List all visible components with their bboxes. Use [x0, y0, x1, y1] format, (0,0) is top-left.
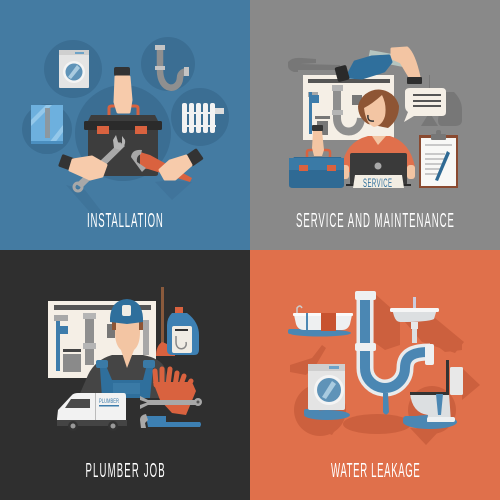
icon: laptop	[346, 153, 411, 186]
icon: top hand	[114, 67, 131, 112]
icon: bathtub	[288, 306, 353, 336]
poster	[303, 75, 394, 140]
silhouette wrench	[288, 58, 340, 72]
panel background blue	[0, 0, 250, 250]
panel background orange	[250, 250, 500, 500]
silhouette hands and tools	[290, 328, 462, 375]
icon: gloves	[153, 369, 196, 415]
icon: van: PLUMBER	[99, 399, 119, 405]
panel: plumber job	[0, 250, 250, 500]
icon: blue toolbox and hand	[289, 125, 344, 188]
heading: water leakage: WATER LEAKAGE	[331, 460, 420, 482]
heading: plumber job: PLUMBER JOB	[86, 460, 165, 482]
icon: sink	[390, 297, 439, 343]
icon: radiator	[182, 103, 224, 133]
jug silhouette	[438, 92, 462, 126]
icon: left hand with wrench	[58, 135, 125, 191]
poster	[48, 301, 156, 378]
icon: toilet	[403, 360, 463, 429]
icon: van	[57, 393, 127, 431]
long shadows	[31, 55, 192, 225]
panel background gray	[250, 0, 500, 250]
panel: service and maintenance	[250, 0, 500, 250]
panel background dark	[0, 250, 250, 500]
icon: clipboard	[419, 130, 458, 188]
icon: woman operator	[342, 90, 415, 172]
icon: plunger	[156, 287, 175, 356]
speech bubble	[404, 88, 446, 122]
icon circles	[22, 37, 229, 181]
icon: leaking pipe	[355, 291, 434, 414]
icon: pipe wrench	[140, 414, 201, 428]
icon: money and hands	[334, 48, 422, 84]
icon: right hand with pipe wrench	[131, 148, 204, 182]
icon: wrench	[140, 396, 202, 409]
panel: water leakage	[250, 250, 500, 500]
panel: installation	[0, 0, 250, 250]
heading: installation: INSTALLATION	[87, 210, 163, 232]
icon: cleaner jug	[167, 307, 199, 355]
sign: service: SERVICE	[363, 177, 392, 191]
sign: service	[353, 175, 404, 191]
plunger silhouette	[421, 75, 438, 126]
icon: arms	[341, 165, 415, 179]
icon: window panel	[31, 105, 63, 144]
long shadows	[294, 293, 480, 445]
heading: service and maintenance: SERVICE AND MAINTENANCE	[296, 210, 454, 232]
icon: pipe trap	[155, 45, 189, 88]
icon: toolbox	[84, 106, 162, 176]
icon: plumber figure	[78, 299, 172, 398]
icon: washing machine	[304, 364, 350, 420]
icon: washing machine	[59, 50, 89, 88]
